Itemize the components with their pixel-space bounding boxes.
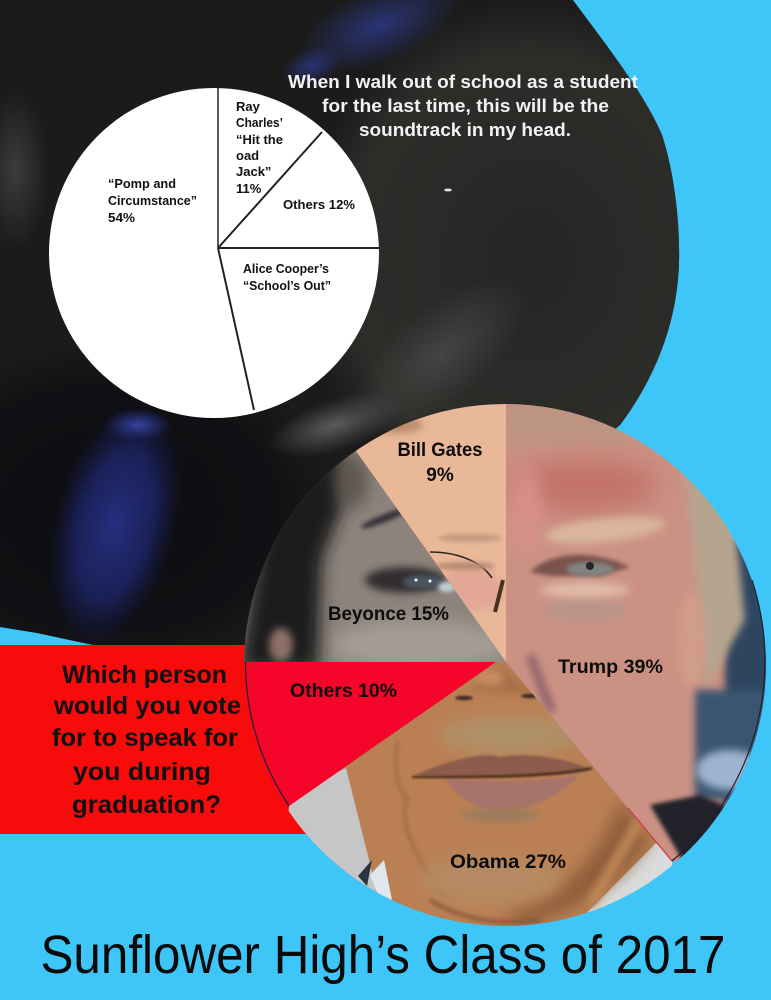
label: Ray Charles: “Hit the (236, 132, 283, 147)
label: Pomp and Circumstance: 54% (108, 210, 135, 225)
panel: red question box (0, 645, 320, 834)
label: Ray Charles: Ray (236, 99, 261, 114)
label: Bill Gates: 9% (426, 465, 454, 486)
slice dividers (218, 88, 379, 410)
label: Bill Gates: Bill Gates (398, 440, 482, 461)
label: Trump: Trump 39% (558, 657, 663, 678)
label: Ray Charles: Jack” (236, 164, 271, 179)
heading: speaker question: for to speak for (52, 724, 238, 752)
pie chart: soundtrack songs (49, 88, 379, 418)
label: Pomp and Circumstance: Circumstance” (108, 193, 197, 208)
label: Pomp and Circumstance (108, 176, 197, 225)
heading: speaker question: would you vote (53, 692, 241, 720)
slice: Beyonce (244, 451, 506, 662)
heading: speaker question: Which person (62, 661, 227, 689)
heading: soundtrack question: When I walk out of school as a student (288, 71, 638, 92)
heading: soundtrack question: soundtrack in my head. (359, 119, 571, 140)
label: Others 12%: Others 12% (283, 197, 355, 212)
label: Ray Charles (236, 99, 283, 196)
label: Ray Charles: Charles’ (236, 115, 283, 130)
label: Beyonce: Beyonce 15% (328, 604, 449, 625)
label: Ray Charles: oad (236, 148, 259, 163)
heading: speaker question: you during (73, 758, 211, 786)
pie chart: commencement speaker faces (230, 390, 771, 940)
label: Others: Others 10% (290, 681, 397, 702)
heading: soundtrack question (288, 71, 638, 140)
heading: speaker question (52, 661, 241, 819)
slice: Trump (506, 404, 766, 862)
slice: Bill Gates (356, 404, 506, 662)
slice edge: Trump / Obama (628, 808, 672, 861)
title: Sunflower High’s Class of 2017 (40, 925, 726, 985)
heading: speaker question: graduation? (72, 791, 221, 819)
vinyl record (0, 0, 680, 645)
arc outlines (246, 662, 289, 806)
label: Pomp and Circumstance: “Pomp and (108, 176, 176, 191)
label: Alice Cooper (243, 261, 331, 293)
label: Alice Cooper: Alice Cooper’s (243, 261, 329, 276)
label: Obama: Obama 27% (450, 852, 566, 873)
heading: soundtrack question: for the last time, this will be the (322, 95, 609, 116)
label: Ray Charles: 11% (236, 181, 262, 196)
label: Bill Gates (398, 440, 482, 486)
slice: Obama (288, 662, 672, 926)
slice: Others (244, 662, 496, 808)
label: Alice Cooper: “School’s Out” (243, 278, 331, 293)
